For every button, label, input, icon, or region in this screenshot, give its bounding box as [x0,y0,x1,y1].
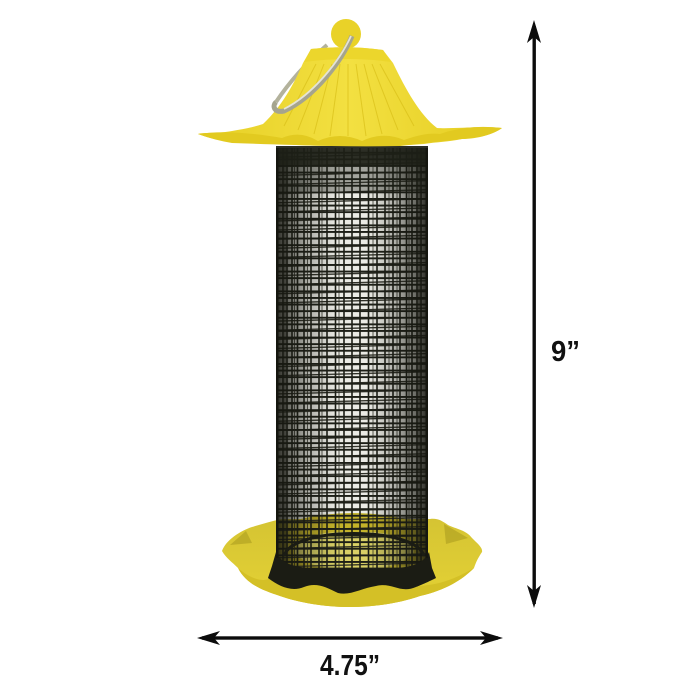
ring back strand [276,45,327,102]
width arrow [197,631,503,645]
bottom dark band [268,552,436,594]
yellow rim seen through mesh [284,513,420,566]
roof [198,19,502,146]
width label: 4.75” [320,650,380,682]
black inner arc [284,534,424,556]
ring front strand [274,36,352,111]
bottom dish [222,519,482,607]
height arrow [527,20,541,608]
roof ball [331,19,361,49]
height label: 9” [551,336,580,368]
mesh cylinder [268,146,436,594]
interior background [276,148,428,518]
inner pale floor [294,532,414,570]
